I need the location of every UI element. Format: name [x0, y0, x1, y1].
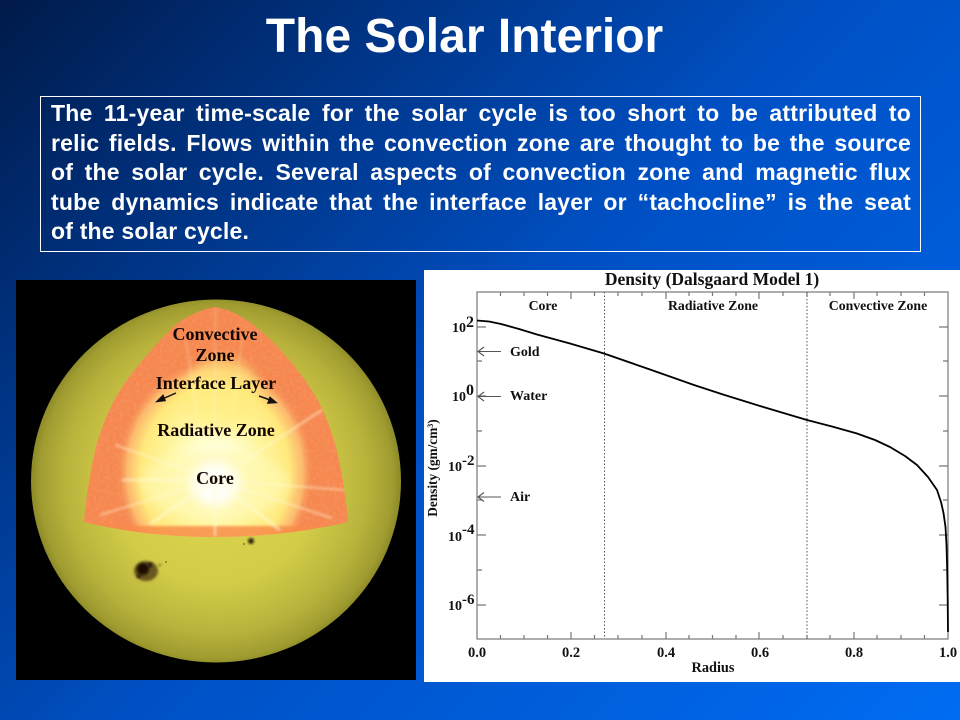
- x axis tick labels: 0.2: [562, 645, 580, 661]
- x axis tick labels: 0.0: [468, 645, 486, 661]
- zone labels: [529, 298, 927, 313]
- wedge labels: Zone: [195, 345, 235, 365]
- chart background: [424, 270, 960, 682]
- zone labels: Core: [529, 298, 557, 313]
- text block: solar cycle explanation: [40, 96, 921, 252]
- zone boundaries: [604, 292, 807, 639]
- y axis tick labels: -2: [462, 453, 474, 469]
- arrow: interface layer left: [157, 393, 176, 402]
- x axis tick labels: 1.0: [939, 645, 957, 661]
- sunspots: [134, 538, 254, 581]
- y axis tick labels: 10: [448, 599, 462, 614]
- y axis tick labels: -6: [462, 592, 475, 608]
- wedge labels: Radiative Zone: [157, 420, 275, 440]
- y axis tick labels: -4: [462, 522, 475, 538]
- arrow: interface layer right: [259, 396, 276, 403]
- y axis tick labels: 2: [466, 314, 474, 331]
- x axis tick labels: [468, 645, 957, 661]
- y axis tick labels: 10: [448, 530, 462, 545]
- zone labels: Radiative Zone: [668, 298, 758, 313]
- y axis tick labels: 0: [466, 382, 474, 399]
- chart: density vs radius: [424, 270, 960, 682]
- y axis tick labels: 10: [452, 390, 466, 405]
- text block: solar cycle explanation: of the solar cycle.: [51, 218, 249, 244]
- x axis title: Radius: [692, 660, 735, 676]
- text block: solar cycle explanation: tube dynamics indicate that the interface layer or “tachocline” is the seat: [51, 189, 911, 215]
- y axis tick labels: 10: [452, 321, 466, 336]
- y axis tick labels: [448, 314, 475, 614]
- title: The Solar Interior: [266, 10, 663, 63]
- y axis title: ): [425, 419, 440, 424]
- black image background: [16, 280, 416, 680]
- wedge labels: Interface Layer: [156, 373, 276, 393]
- reference arrows and labels: Water: [510, 389, 547, 404]
- x axis tick labels: 0.8: [845, 645, 863, 661]
- y axis tick labels: 10: [448, 460, 462, 475]
- wedge labels: Convective: [173, 324, 257, 344]
- text block: solar cycle explanation: The 11-year time-scale for the solar cycle is too short to be attributed to: [51, 100, 911, 126]
- zone labels: Convective Zone: [829, 298, 927, 313]
- x axis tick labels: 0.6: [751, 645, 769, 661]
- text block: solar cycle explanation: of the solar cycle. Several aspects of convection zone and magnetic flux: [51, 159, 911, 185]
- sun disc: [31, 300, 401, 662]
- wedge labels: [156, 324, 276, 488]
- cutaway wedge: [84, 307, 348, 537]
- plot frame and ticks: [477, 292, 948, 639]
- reference arrows and labels: [478, 345, 547, 505]
- y axis title: Density (gm/cm: [425, 428, 440, 517]
- y axis title: 3: [426, 424, 435, 428]
- reference arrows and labels: Air: [510, 490, 530, 505]
- panel: sun cutaway illustration: [16, 280, 416, 680]
- text block: solar cycle explanation: relic fields. Flows within the convection zone are thought to be the source: [51, 130, 911, 156]
- density curve: [477, 320, 948, 632]
- x axis tick labels: 0.4: [657, 645, 675, 661]
- reference arrows and labels: Gold: [510, 345, 540, 360]
- wedge labels: Core: [196, 468, 234, 488]
